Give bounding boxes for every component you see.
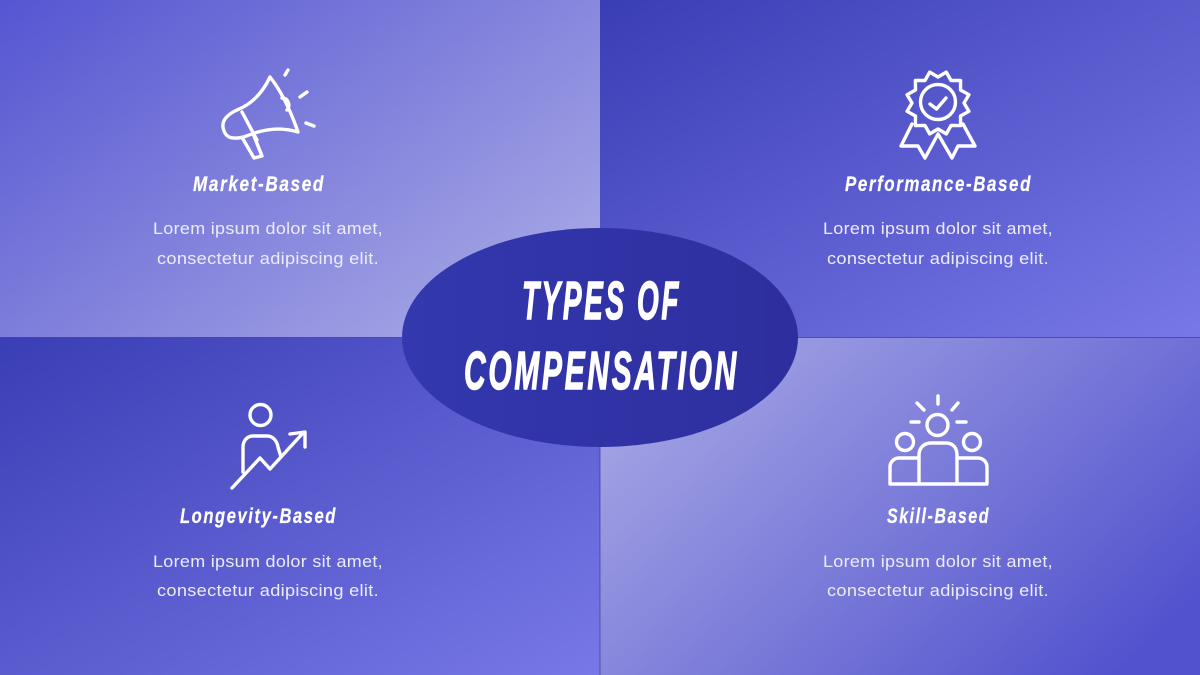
heading: performance-based: Performance-Based: [845, 173, 1032, 196]
text: longevity-based description: consectetur adipiscing elit.: [157, 581, 379, 600]
panel: market-based: [0, 0, 600, 338]
icon: person with rising arrow: [232, 404, 305, 488]
center ellipse with title: [402, 228, 798, 447]
heading: longevity-based: Longevity-Based: [180, 505, 337, 528]
text: performance-based description: [823, 219, 1053, 268]
text: performance-based description: Lorem ipsum dolor sit amet,: [823, 219, 1053, 238]
icon: award ribbon: [901, 72, 975, 158]
text: skill-based description: Lorem ipsum dolor sit amet,: [823, 552, 1053, 571]
heading: skill-based: Skill-Based: [887, 505, 990, 528]
text: skill-based description: consectetur adipiscing elit.: [827, 581, 1049, 600]
title: TYPES OF: [522, 271, 681, 331]
text: longevity-based description: [153, 552, 383, 600]
text: market-based description: Lorem ipsum dolor sit amet,: [153, 219, 383, 238]
icon: team with sun rays: [890, 396, 987, 484]
text: market-based description: [153, 219, 383, 268]
panel: longevity-based: [0, 338, 600, 675]
text: skill-based description: [823, 552, 1053, 600]
icon: megaphone: [223, 70, 314, 158]
title: [464, 271, 739, 401]
text: market-based description: consectetur adipiscing elit.: [157, 249, 379, 268]
heading: market-based: Market-Based: [193, 173, 325, 196]
text: longevity-based description: Lorem ipsum dolor sit amet,: [153, 552, 383, 571]
panel: skill-based: [600, 338, 1200, 675]
text: performance-based description: consectetur adipiscing elit.: [827, 249, 1049, 268]
title: COMPENSATION: [464, 341, 739, 401]
panel: performance-based: [600, 0, 1200, 338]
